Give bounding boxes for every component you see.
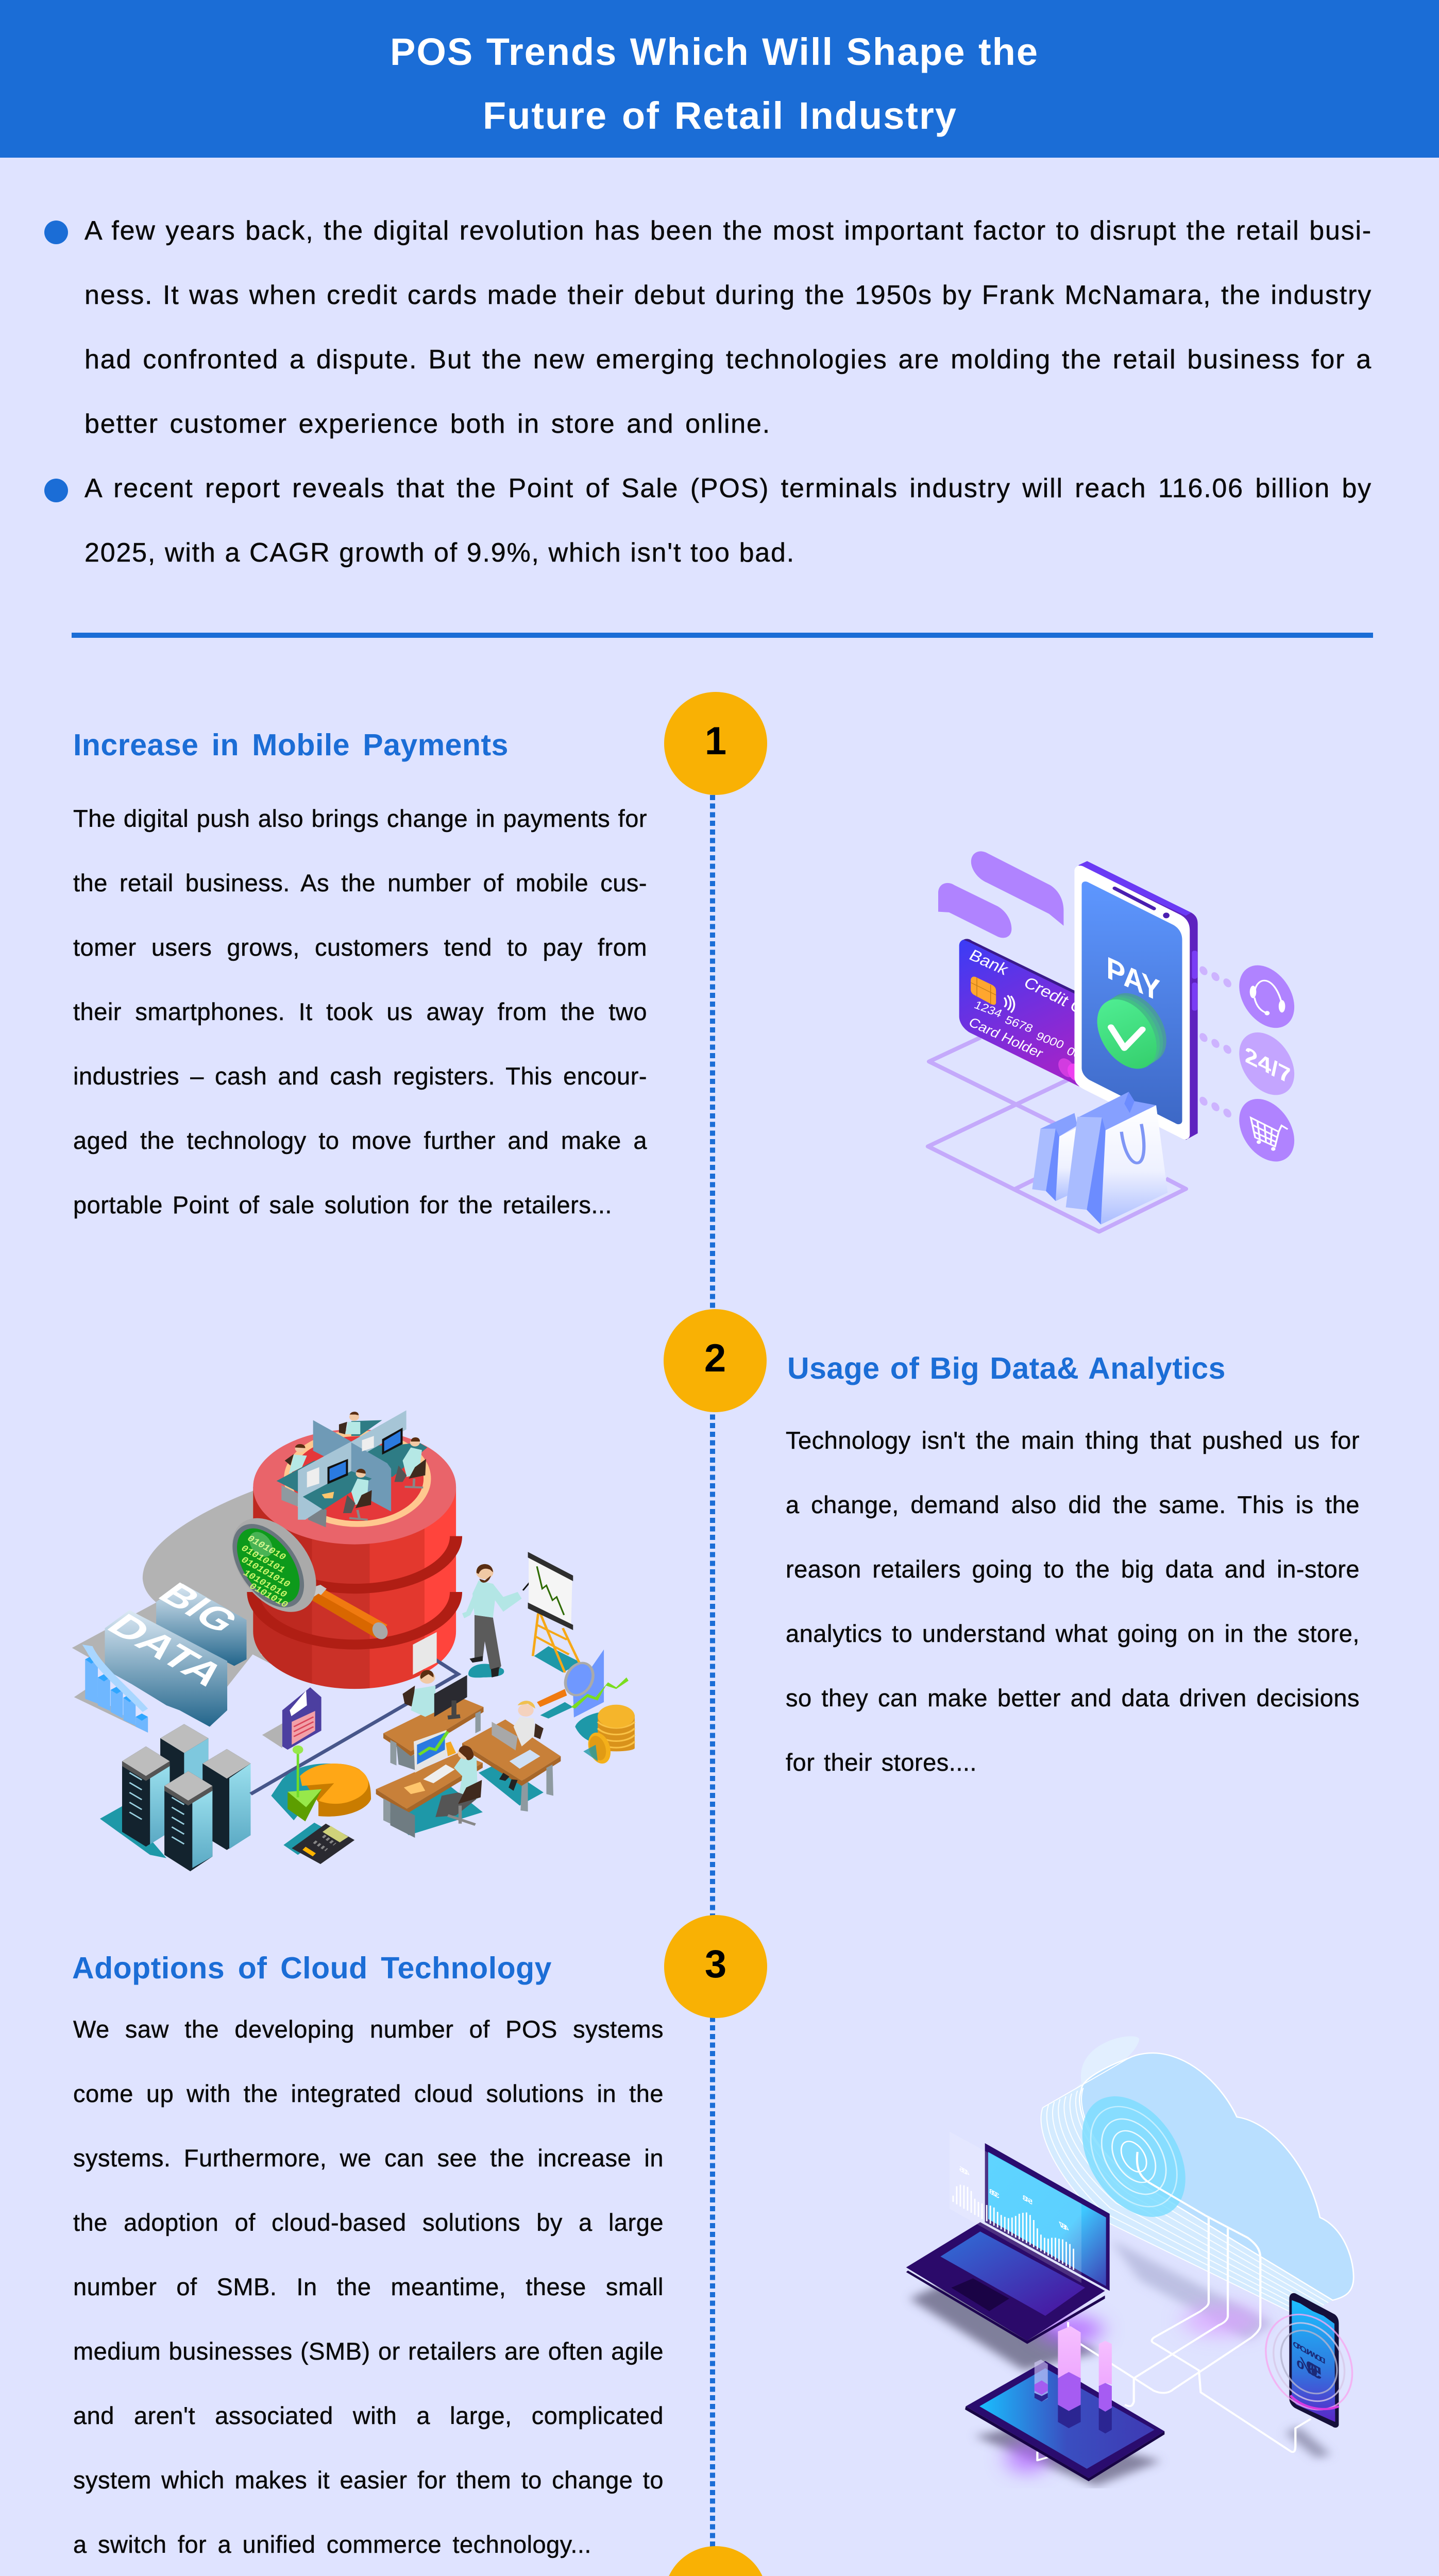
calculator <box>283 1823 354 1864</box>
intro paragraph 1 <box>84 216 1372 439</box>
mirrored chart values <box>959 2165 1069 2233</box>
big data 3d text <box>98 1577 248 1727</box>
text: big data: a change, demand also did the same. This is the <box>786 1491 1360 1518</box>
text: cloud technology: come up with the integrated cloud solutions in the <box>73 2080 664 2107</box>
text: cloud technology: We saw the developing number of POS systems <box>73 2015 664 2043</box>
title: Future of Retail Industry <box>483 94 957 137</box>
smartphone <box>1074 861 1198 1140</box>
number badge 3 <box>664 1915 767 2018</box>
database cylinder <box>253 1429 456 1689</box>
number badge 4 <box>664 2546 767 2576</box>
timeline dotted line <box>710 795 715 2576</box>
text: cloud technology: and aren't associated with a large, complicated <box>73 2402 664 2429</box>
mini bar chart <box>82 1645 148 1733</box>
grey shadow <box>72 1491 294 1727</box>
text: big data: analytics to understand what going on in the store, <box>786 1620 1360 1647</box>
purple glow <box>1006 2305 1262 2473</box>
desk worker top <box>383 1670 484 1773</box>
credit card <box>959 939 1097 1087</box>
cubicle team <box>277 1410 427 1527</box>
presenter <box>462 1552 581 1677</box>
credit card: Bank <box>966 946 1012 978</box>
text: cloud technology: the adoption of cloud-based solutions by a large <box>73 2209 664 2236</box>
mirrored download text: DOWNLOAD <box>1293 2340 1326 2366</box>
pie chart <box>271 1745 371 1821</box>
text: big data: Technology isn't the main thing that pushed us for <box>786 1427 1360 1454</box>
text: cloud technology: systems. Furthermore, we can see the increase in <box>73 2144 664 2172</box>
people <box>285 1412 426 1520</box>
circuit lines <box>1037 2152 1311 2460</box>
mirrored chart values: 543 <box>1022 2194 1032 2207</box>
heading: increase in mobile payments: Increase in Mobile Payments <box>73 728 509 762</box>
floppy disk <box>262 1687 321 1750</box>
illustration: big data <box>72 1411 636 1871</box>
big data 3d text: BIG <box>149 1577 248 1639</box>
number badge 2: 2 <box>704 1336 726 1380</box>
coins and report <box>537 1650 635 1765</box>
credit card: 9000 <box>1034 1029 1066 1051</box>
magnifier <box>215 1507 390 1640</box>
mirrored chart values: 487 <box>1059 2220 1069 2233</box>
mirrored download text <box>1293 2340 1326 2384</box>
text: big data <box>786 1427 1360 1776</box>
icon: 24/7 <box>1228 1025 1305 1103</box>
intro paragraph 1: A few years back, the digital revolution has been the most important factor to disrupt the retail busi- <box>84 216 1372 246</box>
cloud <box>1041 2036 1353 2318</box>
number badge 1: 1 <box>705 719 726 763</box>
header banner <box>0 0 1439 158</box>
text: big data: reason retailers going to the big data and in-store <box>786 1555 1360 1583</box>
text: cloud technology: medium businesses (SMB) or retailers are often agile <box>73 2337 664 2365</box>
speech bubbles <box>938 851 1063 938</box>
intro paragraph 2 <box>84 473 1372 568</box>
bullet 1 <box>44 221 68 244</box>
number badge 2 <box>664 1309 767 1412</box>
laptop <box>906 2131 1110 2344</box>
text: mobile payments: the retail business. As the number of mobile cus- <box>73 869 647 896</box>
text: cloud technology <box>73 2015 664 2558</box>
illustration: mobile payment <box>925 851 1294 1234</box>
mirrored download text: 50% <box>1296 2351 1322 2384</box>
title: POS Trends Which Will Shape the <box>390 30 1039 73</box>
laptop wave chart <box>953 2184 1074 2270</box>
credit card: 00 <box>1064 1045 1084 1061</box>
icon: headset <box>1228 958 1305 1036</box>
intro paragraph 1: ness. It was when credit cards made their debut during the 1950s by Frank McNamara, the industry <box>84 280 1372 310</box>
connector dots <box>1198 965 1233 1118</box>
magnifier: 10101010 <box>241 1568 290 1600</box>
magnifier: 0101010 <box>247 1581 291 1610</box>
credit card: Credit Ca <box>1021 973 1097 1022</box>
easel <box>528 1552 579 1672</box>
desk workers bottom <box>376 1701 561 1838</box>
server racks <box>100 1724 250 1871</box>
text: mobile payments: The digital push also brings change in payments for <box>73 805 647 832</box>
credit card: Card Holder <box>966 1014 1046 1061</box>
icon: 24/7: 24/7 <box>1245 1041 1291 1090</box>
chart shadow <box>74 1689 148 1733</box>
check badge <box>1085 985 1178 1077</box>
text: mobile payments: industries – cash and cash registers. This encour- <box>73 1062 647 1090</box>
magnifier: 01010101 <box>239 1544 287 1575</box>
number badge 3: 3 <box>705 1942 726 1986</box>
text: big data: for their stores.... <box>786 1749 977 1776</box>
text: mobile payments: tomer users grows, customers tend to pay from <box>73 934 647 961</box>
shopping bags <box>1032 1092 1167 1225</box>
text: cloud technology: system which makes it easier for them to change to <box>73 2466 664 2494</box>
mirrored chart values: 328 <box>989 2188 1000 2200</box>
heading: cloud technology: Adoptions of Cloud Technology <box>72 1951 552 1985</box>
number badge 1 <box>664 692 767 795</box>
illustration: cloud <box>906 2036 1354 2488</box>
floor grid <box>928 1038 1186 1232</box>
icon: cart <box>1228 1091 1305 1169</box>
mirrored chart values: 435 <box>959 2165 970 2178</box>
monitors <box>307 1428 402 1487</box>
shadows <box>910 2240 1331 2486</box>
phone <box>1250 2293 1368 2428</box>
text: mobile payments: their smartphones. It took us away from the two <box>73 998 647 1025</box>
credit card: 1234 <box>972 998 1004 1020</box>
title <box>390 30 1039 137</box>
wall plate <box>413 1632 437 1675</box>
intro paragraph 1: better customer experience both in store and online. <box>84 409 771 439</box>
text: cloud technology: number of SMB. In the meantime, these small <box>73 2273 664 2300</box>
text: mobile payments: portable Point of sale solution for the retailers... <box>73 1191 612 1218</box>
text: mobile payments <box>73 805 647 1219</box>
text: mobile payments: aged the technology to move further and make a <box>73 1127 647 1154</box>
bullet 2 <box>44 479 68 502</box>
intro paragraph 2: A recent report reveals that the Point of Sale (POS) terminals industry will reach 116.06 billion by <box>84 473 1372 503</box>
intro paragraph 1: had confronted a dispute. But the new emerging technologies are molding the retail business for a <box>84 345 1372 375</box>
heading: big data: Usage of Big Data& Analytics <box>787 1351 1226 1385</box>
credit card: 5678 <box>1003 1013 1035 1035</box>
text: cloud technology: a switch for a unified commerce technology... <box>73 2531 591 2558</box>
intro paragraph 2: 2025, with a CAGR growth of 9.9%, which isn't too bad. <box>84 538 795 568</box>
tablet with bars <box>965 2326 1164 2481</box>
big data 3d text: DATA <box>98 1607 234 1692</box>
pay label: PAY <box>1106 950 1160 1009</box>
network pipes <box>250 1654 458 1794</box>
text: big data: so they can make better and data driven decisions <box>786 1684 1360 1711</box>
magnifier: 010101010 <box>239 1555 293 1589</box>
magnifier: 0101010 <box>245 1533 289 1562</box>
